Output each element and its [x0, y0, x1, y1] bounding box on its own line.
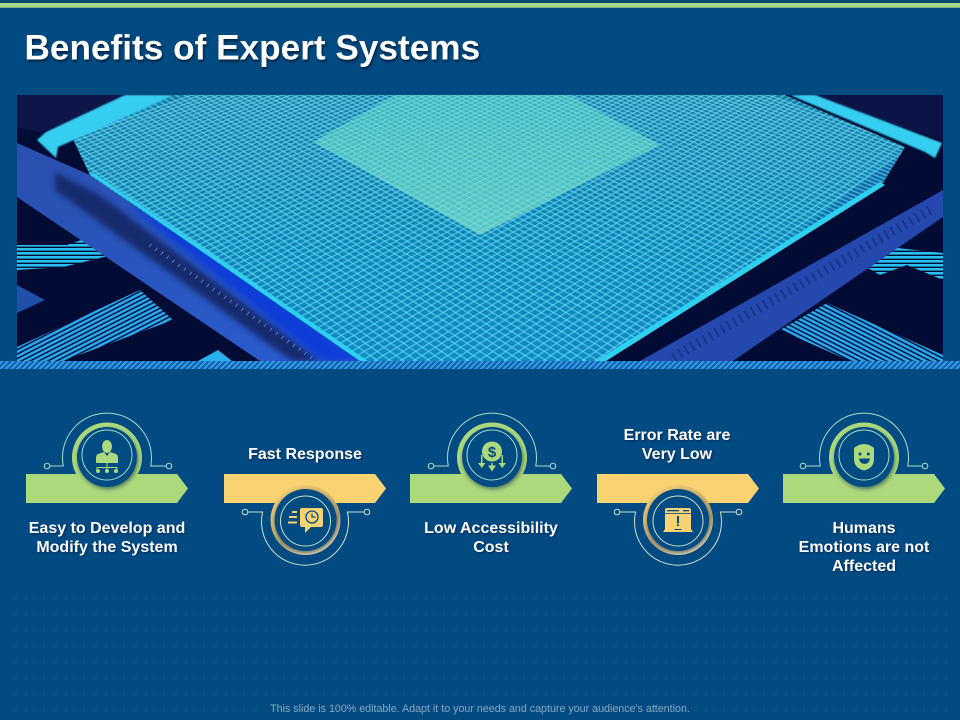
icon: chat clock [288, 508, 323, 533]
icon: error window [663, 508, 693, 532]
arrow bar 5 [783, 474, 945, 503]
label 1: Modify the System [36, 539, 178, 556]
label 1: Easy to Develop and [29, 520, 185, 537]
label 5: Humans [832, 520, 896, 537]
badge 5 [829, 422, 899, 492]
badge 3 [457, 422, 527, 492]
top accent bar [0, 0, 960, 8]
icon: dollar with down arrows: $ [488, 444, 497, 461]
arrow bar 4 [597, 474, 759, 503]
connector arc 5 [800, 413, 928, 469]
step 4: error rate [597, 427, 759, 565]
icon: smiling face [854, 444, 874, 470]
badge 4 [643, 485, 713, 555]
step 1: easy to develop [26, 413, 188, 556]
icon: dollar with down arrows [478, 442, 506, 472]
connector arc 4 [614, 509, 742, 565]
connector arc 2 [242, 509, 370, 565]
footer note: This slide is 100% editable. Adapt it to your needs and capture your audience's attention. [270, 703, 690, 715]
arrow bar 1 [26, 474, 188, 503]
label 3: Cost [473, 539, 509, 556]
striped divider band [0, 361, 960, 369]
label 3: Low Accessibility [424, 520, 558, 537]
step 5: human emotions [783, 413, 945, 575]
step 2: fast response [224, 446, 386, 565]
label 4: Error Rate are [624, 427, 730, 444]
connector arc 1 [44, 413, 172, 469]
faint binary pattern [8, 588, 952, 712]
label 5: Emotions are not [799, 539, 930, 556]
label 2: Fast Response [248, 446, 362, 463]
label 4: Very Low [642, 446, 713, 463]
icon: person with network [96, 440, 118, 473]
step 3: low accessibility cost [410, 413, 572, 556]
connector arc 3 [428, 413, 556, 469]
arrow bar 3 [410, 474, 572, 503]
badge 1 [72, 422, 142, 492]
label 5: Affected [832, 558, 896, 575]
title: Benefits of Expert Systems [24, 28, 480, 68]
arrow bar 2 [224, 474, 386, 503]
badge 2 [270, 485, 340, 555]
hero image: microchip [17, 95, 943, 361]
